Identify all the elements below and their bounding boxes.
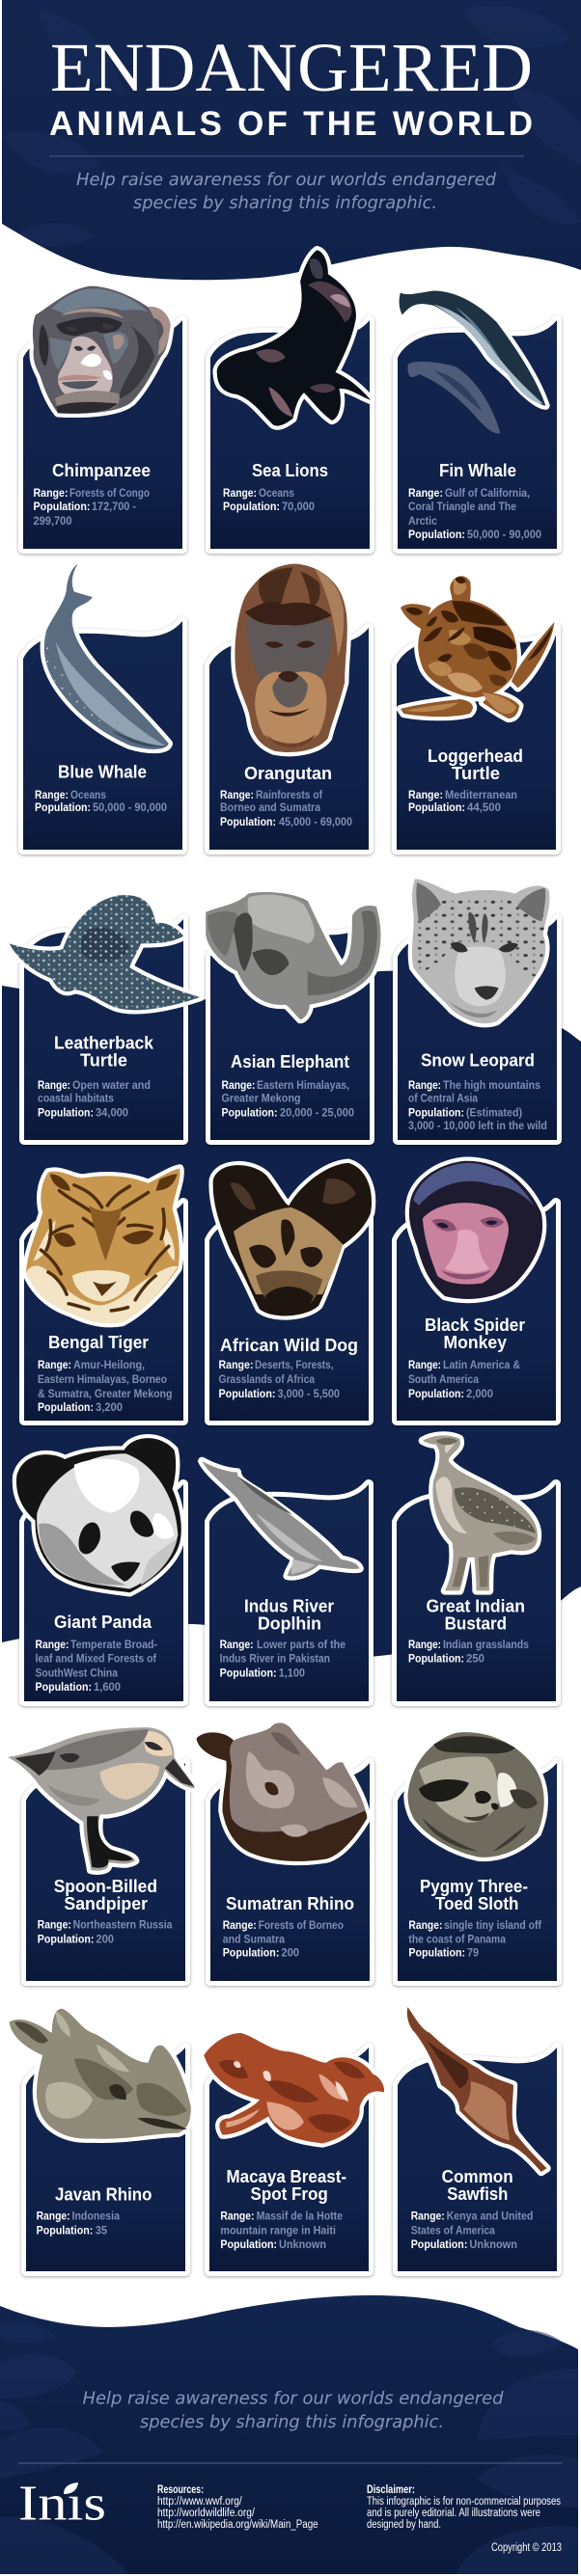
icon: loggerhead turtle — [401, 576, 554, 719]
details: SouthWest China — [35, 1668, 119, 1680]
card: African Wild Dog — [209, 1163, 372, 1421]
details: 200 — [96, 1935, 114, 1946]
details — [408, 1080, 547, 1132]
details: Massif de la Hotte — [257, 2211, 343, 2223]
details: Forests of Congo — [69, 488, 150, 500]
card: Leatherback Turtle — [10, 895, 200, 1140]
details: Range: — [220, 2211, 254, 2223]
name: Common — [442, 2167, 513, 2186]
title line: Endangered: ENDANGERED — [50, 29, 533, 106]
details: leaf and Mixed Forests of — [35, 1653, 156, 1665]
details: Kenya and United — [447, 2211, 533, 2223]
details: Range: — [220, 1640, 254, 1651]
details: Range: — [408, 1920, 442, 1932]
details — [223, 488, 315, 513]
details: Latin America & — [443, 1360, 520, 1371]
name: Loggerhead — [428, 746, 523, 766]
card: Asian Elephant — [206, 892, 380, 1140]
details: Lower parts of the — [257, 1640, 346, 1651]
details: Forests of Borneo — [259, 1920, 344, 1932]
details: of Central Asia — [408, 1094, 479, 1105]
resources: http://en.wikipedia.org/wiki/Main_Page — [157, 2519, 318, 2531]
card: Great Indian Bustard — [397, 1435, 556, 1701]
details: 2,000 — [466, 1389, 493, 1400]
details: Population: — [408, 1389, 464, 1400]
details — [223, 1920, 344, 1960]
details: Range: — [38, 1360, 71, 1371]
card panel — [23, 621, 182, 850]
details: Range: — [222, 1080, 255, 1092]
details: Population: — [218, 1389, 276, 1400]
details: Population: — [411, 2239, 467, 2251]
details: Population: — [220, 817, 276, 828]
icon: leatherback turtle — [10, 895, 200, 1010]
details: 1,100 — [279, 1668, 305, 1680]
details — [38, 1920, 173, 1946]
name: Black Spider — [425, 1315, 525, 1335]
details: 34,000 — [96, 1107, 128, 1119]
details: Population: — [408, 1948, 465, 1960]
details — [408, 1920, 541, 1960]
name: Sumatran Rhino — [226, 1894, 354, 1913]
icon: snow leopard — [412, 879, 550, 1023]
details — [35, 1640, 157, 1694]
details — [411, 2211, 533, 2251]
name — [54, 1034, 154, 1071]
name: Sandpiper — [64, 1894, 148, 1913]
name — [427, 1597, 525, 1634]
details: Population: — [220, 1668, 277, 1680]
name: Doplhin — [258, 1614, 321, 1634]
card: Indus River Dolphin — [202, 1461, 369, 1701]
details: Range: — [411, 2211, 445, 2223]
icon: asian elephant — [206, 892, 380, 1019]
logo: Inis: Inıs — [18, 2477, 106, 2532]
details: Population: — [408, 1107, 464, 1119]
name: Bengal Tiger — [48, 1333, 149, 1352]
name: Monkey — [444, 1333, 507, 1352]
details: Population: — [38, 1107, 94, 1119]
details: Population: — [222, 1107, 278, 1119]
details: Range: — [35, 790, 69, 801]
details: South America — [408, 1374, 480, 1386]
icon: african wild dog — [213, 1163, 372, 1315]
card panel — [398, 2047, 557, 2271]
details: Open water and — [72, 1080, 151, 1092]
card: Blue Whale — [23, 564, 182, 850]
name: Turtle — [452, 764, 500, 783]
icon: indus river dolphin — [202, 1461, 360, 1576]
details: Range: — [223, 1920, 257, 1932]
name: Snow Leopard — [421, 1051, 535, 1071]
details — [38, 1080, 151, 1119]
details: coastal habitats — [38, 1094, 114, 1105]
name: African Wild Dog — [220, 1336, 358, 1355]
details: 3,200 — [96, 1402, 123, 1414]
details — [35, 790, 167, 814]
details: the coast of Panama — [408, 1935, 507, 1946]
details: Range: — [220, 790, 254, 801]
details — [222, 1080, 354, 1119]
details: Borneo and Sumatra — [220, 802, 321, 814]
header background — [2, 0, 581, 280]
name — [425, 1315, 525, 1352]
details: and Sumatra — [223, 1935, 286, 1946]
details: Population: — [223, 502, 280, 513]
details: (Estimated) — [466, 1107, 522, 1119]
details: 20,000 - 25,000 — [280, 1107, 354, 1119]
icon: macaya breast-spot frog — [204, 2033, 384, 2143]
details: mountain range in Haiti — [220, 2226, 336, 2237]
details: 70,000 — [282, 502, 315, 513]
icon: bengal tiger — [26, 1169, 180, 1323]
dark middle band — [2, 971, 581, 1657]
name: Leatherback — [54, 1034, 154, 1053]
details: 250 — [466, 1653, 484, 1665]
details: & Sumatra, Greater Mekong — [38, 1389, 172, 1400]
name: Pygmy Three- — [420, 1877, 528, 1896]
title line: Animals of the World: ANIMALS OF THE WORLD — [49, 105, 533, 143]
details: Oceans — [70, 790, 106, 801]
name: Chimpanzee — [52, 461, 151, 480]
card: Bengal Tiger — [24, 1169, 183, 1421]
card: Macaya Breast-Spot Frog — [204, 2033, 384, 2271]
card: Javan Rhino — [10, 2009, 191, 2271]
disclaimer: and is purely editorial. All illustrations were — [367, 2508, 540, 2519]
details: Unknown — [279, 2239, 326, 2251]
disclaimer: Disclaimer: — [367, 2484, 415, 2496]
details: 35 — [96, 2226, 108, 2237]
details: Deserts, Forests, — [255, 1360, 334, 1371]
name — [428, 746, 523, 783]
details: 1,600 — [94, 1682, 121, 1694]
footer call to action — [83, 2389, 504, 2432]
details: States of America — [411, 2226, 495, 2237]
card: Sumatran Rhino — [197, 1722, 370, 1981]
card panel — [26, 2047, 185, 2271]
details: Range: — [35, 1640, 69, 1651]
details: Oceans — [259, 488, 294, 500]
details: Range: — [223, 488, 257, 500]
details: Range: — [408, 790, 443, 801]
card panel — [398, 919, 557, 1140]
card panel — [397, 1484, 556, 1701]
card: Loggerhead Turtle — [397, 576, 556, 850]
card panel — [209, 1203, 369, 1421]
details: 172,700 - — [92, 502, 136, 513]
name: Javan Rhino — [55, 2185, 152, 2205]
card: Spoon-Billed Sandpiper — [8, 1727, 195, 1981]
details — [37, 2211, 121, 2237]
card panel — [210, 320, 370, 549]
details: Population: — [38, 1935, 95, 1946]
details: Population: — [408, 529, 465, 541]
details: Indian grasslands — [443, 1640, 529, 1651]
details — [38, 1360, 172, 1414]
card: Pygmy Three-Toed Sloth — [398, 1732, 557, 1981]
name — [244, 1597, 334, 1634]
details — [408, 1360, 520, 1400]
card panel — [209, 1484, 369, 1701]
icon: pygmy three-toed sloth — [408, 1732, 544, 1857]
details: Range: — [33, 488, 68, 500]
details — [220, 1640, 346, 1680]
details: Range: — [408, 1640, 441, 1651]
name: Sea Lions — [252, 461, 328, 480]
icon: chimpanzee — [33, 286, 171, 414]
details — [408, 790, 517, 814]
card: Orangutan — [209, 564, 369, 850]
details — [408, 1640, 529, 1665]
details: 299,700 — [33, 516, 71, 528]
details: 79 — [467, 1948, 479, 1960]
details: Temperate Broad- — [70, 1640, 157, 1651]
details: Population: — [220, 2239, 277, 2251]
name — [420, 1877, 528, 1913]
details: Indus River in Pakistan — [220, 1653, 330, 1665]
details — [33, 488, 150, 528]
footer call to action: species by sharing this infographic. — [140, 2412, 444, 2432]
name: Orangutan — [244, 764, 332, 783]
details — [220, 790, 352, 828]
details: Arctic — [408, 516, 438, 528]
name — [226, 2167, 346, 2204]
card: Snow Leopard — [398, 879, 557, 1140]
details: Mediterranean — [445, 790, 517, 801]
details: 45,000 - 69,000 — [279, 817, 352, 828]
card: Giant Panda — [16, 1438, 183, 1701]
details: Range: — [408, 1080, 441, 1092]
details: Grasslands of Africa — [218, 1374, 316, 1386]
details: Range: — [218, 1360, 253, 1371]
details: Eastern Himalayas, Borneo — [38, 1374, 167, 1386]
details: Coral Triangle and The — [408, 502, 516, 513]
name: Macaya Breast- — [226, 2167, 346, 2186]
details: Population: — [223, 1948, 279, 1960]
icon: black spider monkey — [409, 1161, 542, 1299]
card panel — [398, 320, 557, 549]
details: Population: — [35, 1682, 92, 1694]
card panel — [209, 2047, 369, 2271]
icon: spoon-billed sandpiper — [8, 1727, 195, 1871]
icon: common sawfish — [407, 2007, 547, 2172]
details: single tiny island off — [444, 1920, 541, 1932]
details — [220, 2211, 343, 2251]
card: Fin Whale — [398, 291, 557, 549]
icon: leaf — [64, 2482, 78, 2494]
details: 44,500 — [467, 802, 501, 814]
card panel — [397, 627, 556, 850]
card panel — [397, 1203, 556, 1421]
icon: blue whale — [44, 564, 169, 749]
details: Range: — [408, 1360, 441, 1371]
details: 200 — [281, 1948, 299, 1960]
resources: http://www.wwf.org/ — [157, 2496, 242, 2508]
card panel — [26, 1763, 185, 1981]
resources: Resources: — [157, 2484, 204, 2496]
name: Turtle — [80, 1051, 127, 1071]
details: Amur-Heilong, — [73, 1360, 145, 1371]
card panel — [24, 919, 183, 1140]
details — [218, 1360, 340, 1400]
name: Spot Frog — [251, 2184, 328, 2204]
details — [408, 488, 541, 541]
details: 50,000 - 90,000 — [93, 802, 167, 814]
subtitle: species by sharing this infographic. — [133, 193, 437, 213]
icon: sea lion — [217, 250, 371, 426]
card: Common Sawfish — [398, 2007, 557, 2271]
name: Great Indian — [427, 1597, 525, 1616]
name: Sawfish — [447, 2184, 508, 2204]
details: 50,000 - 90,000 — [467, 529, 541, 541]
icon: javan rhino — [10, 2009, 191, 2139]
footer call to action: Help raise awareness for our worlds endangered — [83, 2389, 504, 2409]
card panel — [23, 320, 182, 549]
details: Greater Mekong — [222, 1094, 301, 1105]
icon: sumatran rhino — [197, 1722, 367, 1861]
card: Chimpanzee — [23, 286, 182, 549]
footer background — [0, 2295, 578, 2574]
card panel — [210, 1763, 370, 1981]
icon: giant panda — [16, 1438, 181, 1592]
details: Rainforests of — [256, 790, 322, 801]
resources — [157, 2484, 318, 2531]
details: The high mountains — [443, 1080, 540, 1092]
name: Bustard — [445, 1614, 507, 1634]
details: Population: — [33, 502, 91, 513]
details: Range: — [408, 488, 443, 500]
card: Black Spider Monkey — [397, 1161, 556, 1421]
details: 3,000 - 5,500 — [278, 1389, 340, 1400]
icon: orangutan — [235, 564, 347, 752]
name: Indus River — [244, 1597, 334, 1616]
name: Toed Sloth — [435, 1894, 518, 1913]
name: Giant Panda — [54, 1613, 152, 1632]
disclaimer: designed by hand. — [367, 2519, 441, 2531]
resources: http://worldwildlife.org/ — [157, 2508, 256, 2519]
card panel — [210, 919, 370, 1140]
icon: fin whale — [400, 291, 545, 434]
subtitle — [76, 170, 497, 213]
details: Gulf of California, — [445, 488, 530, 500]
name — [442, 2167, 513, 2204]
title — [49, 29, 533, 143]
card: Sea Lions — [210, 250, 371, 549]
details: Northeastern Russia — [73, 1920, 173, 1932]
name: Blue Whale — [58, 762, 147, 781]
details: Population: — [35, 802, 91, 814]
name — [54, 1877, 157, 1913]
details: Population: — [408, 802, 465, 814]
card panel — [24, 1203, 183, 1421]
card panel — [209, 628, 369, 850]
details: Population: — [408, 1653, 464, 1665]
card panel — [398, 1763, 557, 1981]
details: Population: — [37, 2226, 93, 2237]
details: Range: — [37, 2211, 70, 2223]
name: Asian Elephant — [231, 1052, 349, 1071]
details: Eastern Himalayas, — [257, 1080, 349, 1092]
details: Range: — [38, 1080, 70, 1092]
details: 3,000 - 10,000 left in the wild — [408, 1121, 547, 1132]
subtitle: Help raise awareness for our worlds endangered — [76, 170, 497, 190]
details: Population: — [38, 1402, 94, 1414]
card panel — [24, 1484, 183, 1701]
name: Fin Whale — [439, 461, 516, 480]
details: Indonesia — [71, 2211, 121, 2223]
copyright: Copyright © 2013 — [491, 2542, 562, 2554]
disclaimer — [367, 2484, 561, 2531]
details: Range: — [38, 1920, 71, 1932]
name: Spoon-Billed — [54, 1877, 157, 1896]
details: Unknown — [469, 2239, 517, 2251]
icon: great indian bustard — [423, 1435, 538, 1590]
